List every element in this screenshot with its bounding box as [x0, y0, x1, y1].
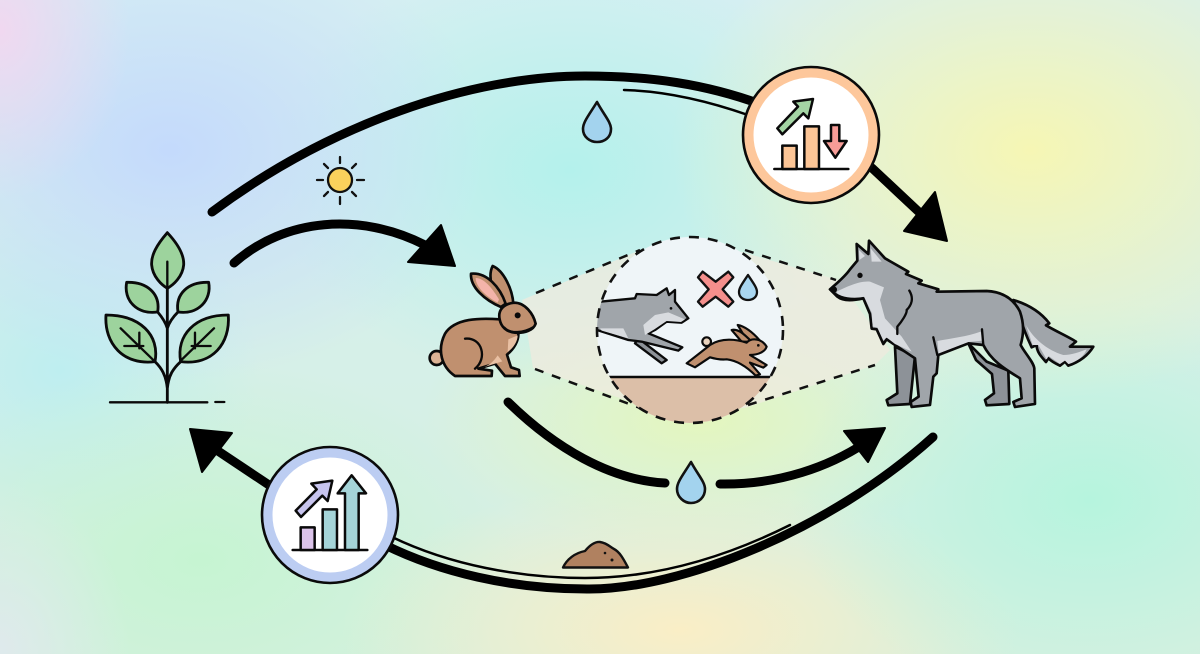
leaf lower right [180, 315, 228, 362]
far rear leg [968, 343, 1009, 405]
far front leg [887, 347, 915, 405]
belly marking [937, 332, 983, 353]
badge: mixed population chart [743, 67, 879, 203]
magnifying beam between rabbit and wolf [522, 250, 890, 408]
icon: small water drop [739, 275, 757, 300]
plant [106, 233, 228, 402]
running hare [687, 325, 767, 376]
arrow: rabbit to wolf [508, 402, 885, 484]
body [441, 319, 520, 376]
leaf top [152, 233, 184, 288]
icon: water drop top [583, 102, 611, 142]
icon: water drop bottom [677, 462, 705, 503]
icon: soil pile [563, 542, 628, 568]
arrow: plant to rabbit [234, 224, 455, 266]
ecosystem cycle diagram [104, 66, 1095, 594]
chest and muzzle markings [837, 282, 912, 352]
icon: red cross [698, 272, 733, 307]
leaf upper left [126, 282, 158, 312]
running wolf [592, 288, 688, 363]
ear inner [859, 248, 882, 262]
body [830, 241, 1035, 407]
leaf upper right [178, 282, 209, 312]
far ear [490, 266, 513, 307]
icon: sun [317, 157, 364, 204]
dashed lens ring [597, 237, 783, 423]
soil [610, 377, 770, 423]
arrow: wolf back to plant [190, 429, 933, 589]
leaf lower left [106, 315, 156, 362]
head [499, 303, 536, 333]
badge: rising population chart [262, 447, 398, 583]
arrow: plant to wolf over the top [212, 76, 947, 241]
rabbit [430, 266, 536, 376]
wolf [830, 241, 1093, 407]
near ear [471, 274, 506, 307]
tail [430, 351, 444, 365]
tail [1013, 300, 1093, 366]
magnified circle scene [590, 237, 790, 427]
